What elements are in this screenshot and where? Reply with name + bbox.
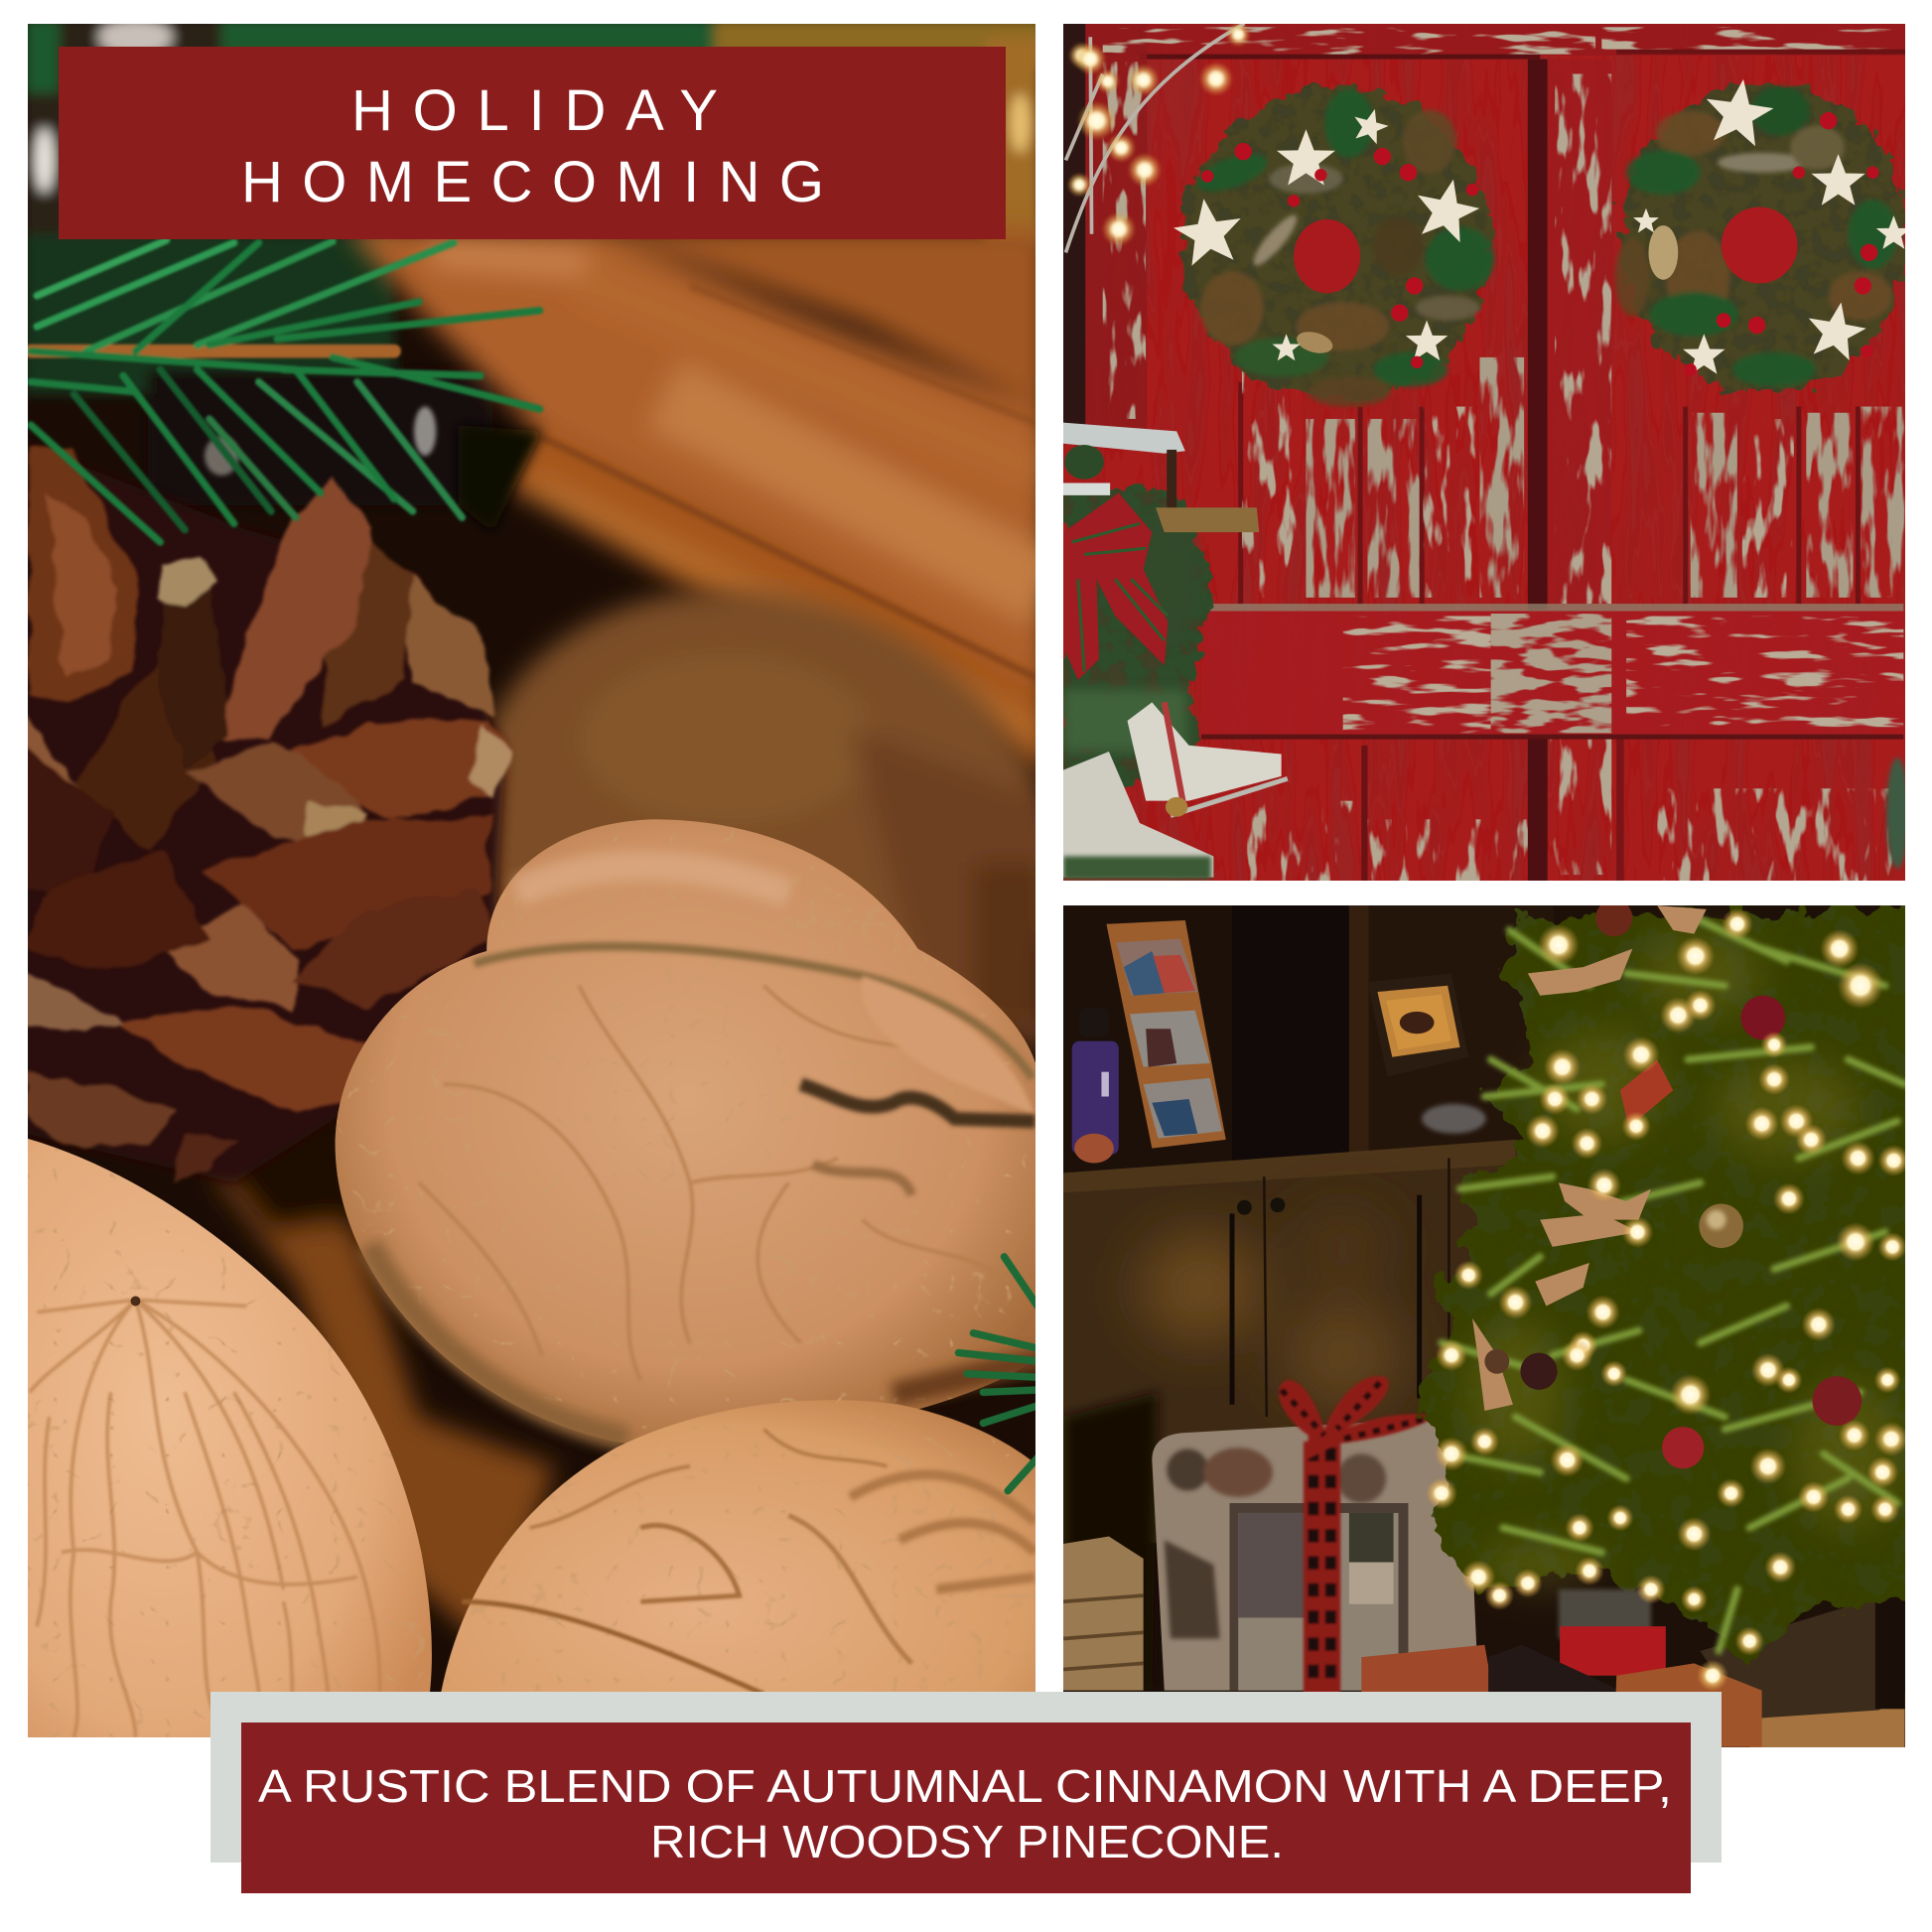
cinnamon sticks bbox=[345, 228, 1047, 773]
wreath: right bbox=[1615, 74, 1911, 393]
walnut: centre bbox=[336, 819, 1047, 1446]
caption text: A RUSTIC BLEND OF AUTUMNAL CINNAMON WITH A DEEP, bbox=[258, 1760, 1672, 1812]
stone stack bbox=[1063, 1537, 1144, 1691]
caption backing panel bbox=[210, 1692, 1722, 1863]
title banner bbox=[59, 47, 1006, 239]
photo: red barn doors with wreaths bbox=[1059, 19, 1911, 888]
title text bbox=[241, 78, 824, 214]
purple bottle bbox=[1072, 1008, 1119, 1164]
fairy lights bbox=[1426, 908, 1910, 1692]
pine cone bbox=[25, 444, 511, 1185]
photo: lit Christmas tree in living room bbox=[1059, 899, 1922, 1752]
tree bbox=[1417, 899, 1922, 1663]
weathered paint bbox=[1103, 27, 1905, 881]
gifts under tree bbox=[1361, 1589, 1762, 1747]
blurred top backdrop bbox=[28, 24, 1035, 401]
title text: HOMECOMING bbox=[241, 150, 824, 214]
title text: HOLIDAY bbox=[351, 78, 718, 143]
sled, bow and ice skates bbox=[1063, 423, 1908, 880]
walnut: lower right bbox=[441, 1400, 1035, 1692]
walnut: lower left bbox=[19, 1136, 432, 1743]
wrapped gift with plaid ribbon bbox=[1152, 1376, 1478, 1694]
photo: pine cone, cinnamon sticks and walnuts bbox=[28, 24, 1035, 1737]
blurred walnut behind bbox=[484, 578, 1035, 1062]
pine needles: lower right bbox=[958, 1257, 1041, 1491]
caption text bbox=[258, 1760, 1672, 1867]
wall and shelf backdrop bbox=[1232, 905, 1554, 1165]
floor and rug bbox=[1701, 1571, 1905, 1749]
framed turkey picture bbox=[1368, 973, 1468, 1077]
paper ornaments bbox=[1472, 905, 1707, 1411]
warm backdrop between walnuts bbox=[207, 1173, 566, 1640]
pine needles: top left bbox=[31, 240, 540, 542]
string lights and branches bbox=[1065, 22, 1251, 252]
cabinet bbox=[1063, 1140, 1528, 1691]
wreath: left bbox=[1171, 85, 1494, 407]
caption text: RICH WOODSY PINECONE. bbox=[650, 1816, 1284, 1867]
caption banner bbox=[241, 1723, 1691, 1893]
door panels and frame bbox=[1059, 19, 1910, 885]
photo board bbox=[1106, 920, 1226, 1149]
